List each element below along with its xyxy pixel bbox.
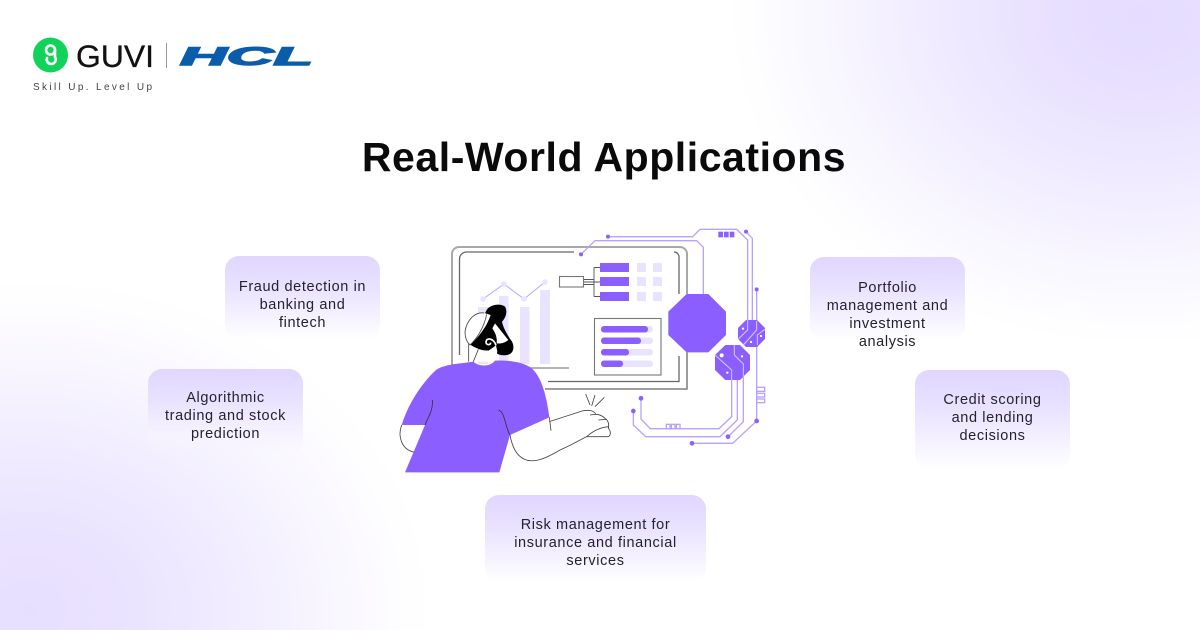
panel: algorithmic trading: prediction [191, 426, 260, 442]
panel: risk management: Risk management for [521, 517, 670, 533]
panel: credit scoring [915, 370, 1070, 470]
GUVI wordmark: GUVI [76, 38, 154, 74]
panel: portfolio management [810, 257, 965, 341]
person: arm and hand [510, 394, 611, 461]
circuit traces and chips [579, 229, 765, 446]
panel: portfolio management: investment [849, 316, 926, 332]
panel: algorithmic trading [148, 369, 303, 455]
logo: GUVI and HCL [33, 38, 313, 93]
person: left arm [400, 425, 415, 452]
icon: GUVI green circle [33, 38, 68, 72]
panel: fraud detection: fintech [279, 315, 326, 331]
progress bars panel [594, 318, 661, 375]
person at the screen [400, 305, 611, 472]
panel: credit scoring: Credit scoring [943, 392, 1042, 408]
panel: fraud detection: Fraud detection in [239, 279, 366, 295]
HCL wordmark: HCL [180, 43, 313, 71]
person: neck [473, 345, 497, 362]
panel: credit scoring: and lending [952, 410, 1033, 426]
dashboard table [560, 263, 662, 301]
bar chart with trend line [478, 279, 550, 364]
monitor [452, 247, 687, 389]
panel: fraud detection [225, 256, 380, 340]
text: analysis [859, 334, 916, 350]
person: hair [469, 305, 513, 355]
panel: portfolio management: Portfolio [858, 280, 917, 296]
person: head wrap [465, 313, 491, 345]
panel: credit scoring: decisions [959, 428, 1026, 444]
panel: algorithmic trading: trading and stock [165, 408, 286, 424]
panel: portfolio management: management and [827, 298, 948, 314]
panel: risk management [485, 495, 706, 582]
title: Real-World Applications [362, 134, 846, 180]
panel: risk management: insurance and financial [514, 535, 677, 551]
panel: fraud detection: banking and [260, 297, 345, 313]
person: shirt [402, 361, 549, 472]
tagline: Skill Up. Level Up [33, 82, 152, 93]
panel: risk management: services [566, 553, 625, 569]
panel: algorithmic trading: Algorithmic [186, 390, 265, 406]
